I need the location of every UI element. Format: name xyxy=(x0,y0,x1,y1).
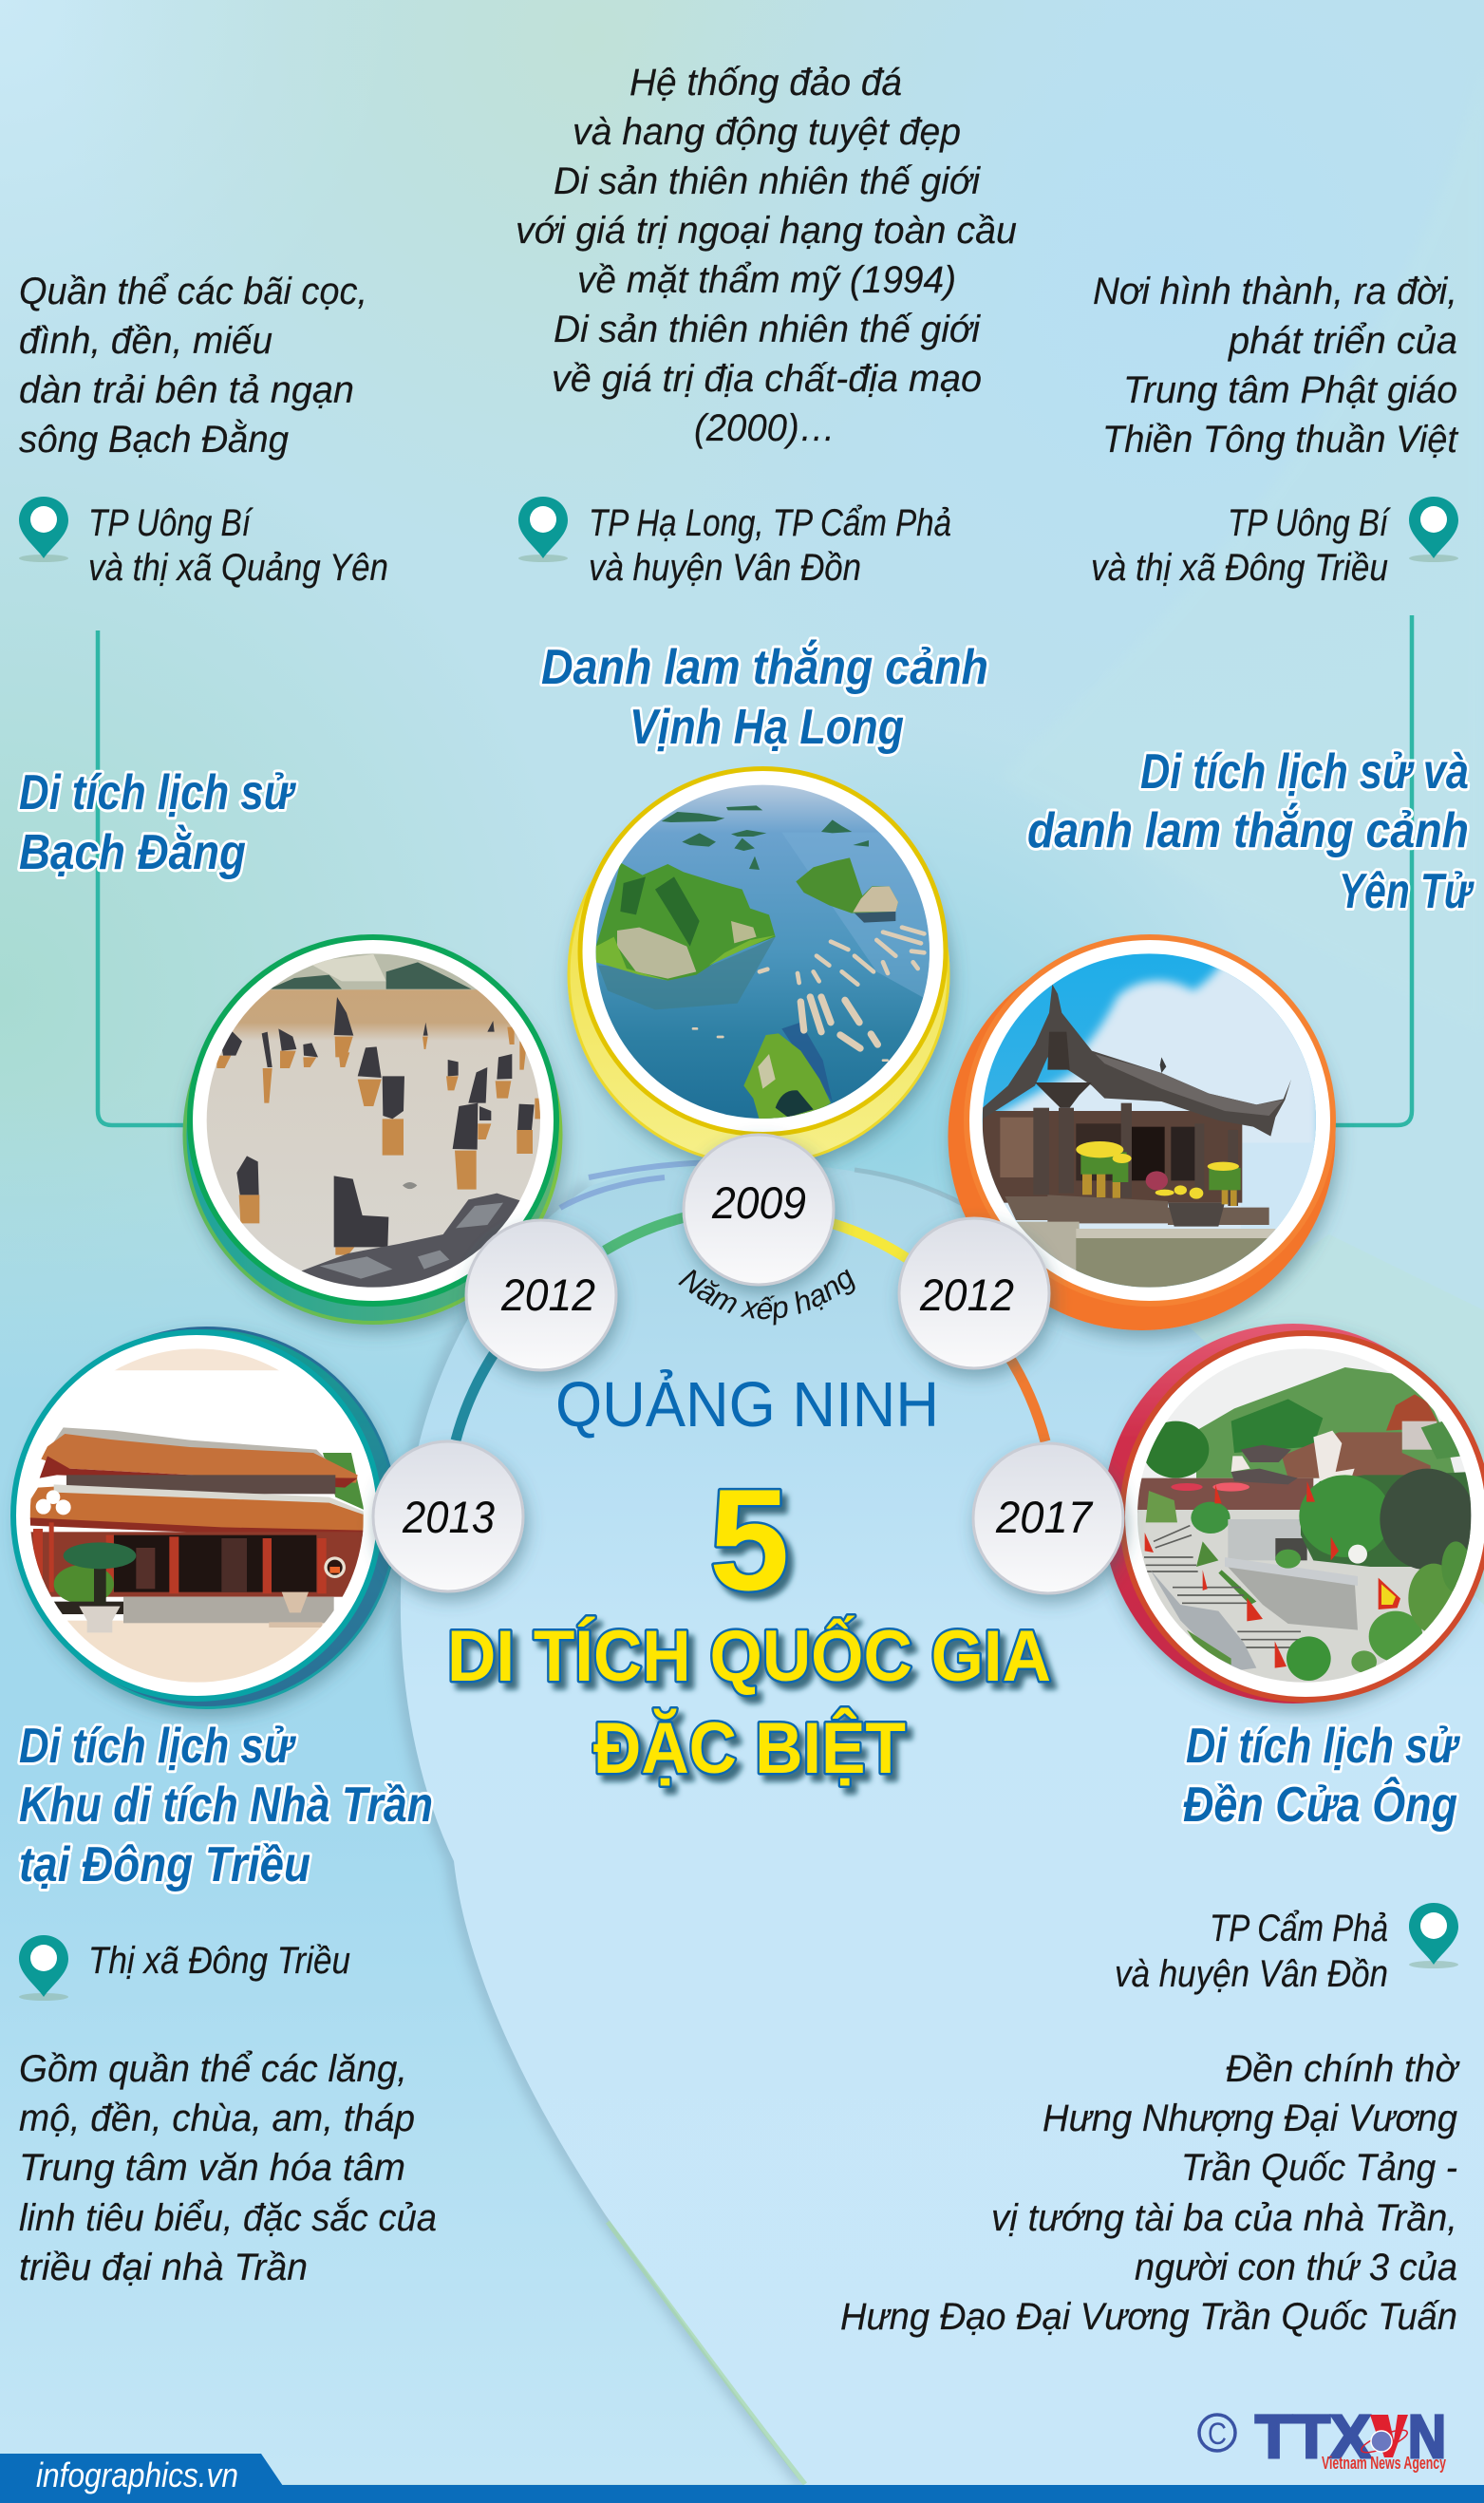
year badge 2012 Bạch Đằng xyxy=(466,1220,616,1370)
heading: Vịnh Hạ Long: Danh lam thắng cảnh xyxy=(541,639,988,695)
title: Di tích quốc gia đặc biệt: DI TÍCH QUỐC GIA xyxy=(447,1616,1051,1697)
text: Đền Cửa Ông description: người con thứ 3 của xyxy=(1135,2247,1457,2288)
year badge 2009: 2009 xyxy=(711,1177,806,1228)
text: Nơi hình thành description xyxy=(1093,271,1459,461)
text: Hệ thống đảo đá description: về giá trị địa chất-địa mạo xyxy=(552,358,982,400)
text: Quần thể description: dàn trải bên tả ngạn xyxy=(19,369,354,411)
text: Quần thể description: Quần thể các bãi cọc, xyxy=(19,271,367,312)
logo: TTXVN: C xyxy=(1208,2417,1227,2451)
photo circle: Khu di tích Nhà Trần xyxy=(10,1327,397,1707)
text: Đền Cửa Ông description: Đền chính thờ xyxy=(1226,2048,1460,2090)
text: Quần thể description xyxy=(19,271,367,461)
curved label: Năm xếp hạng: Năm xếp hạng xyxy=(678,1269,855,1326)
heading: Khu di tích Nhà Trần: Di tích lịch sử xyxy=(19,1719,296,1774)
heading: Vịnh Hạ Long xyxy=(541,639,988,755)
footer band: infographics.vn xyxy=(36,2456,238,2494)
photo circle: Yên Tử xyxy=(948,934,1336,1330)
year badge 2017 xyxy=(973,1443,1123,1593)
year badge 2012 Bạch Đằng: 2012 xyxy=(500,1270,595,1320)
title: Di tích quốc gia đặc biệt xyxy=(447,1616,1051,1789)
heading: Vịnh Hạ Long: Vịnh Hạ Long xyxy=(629,700,904,755)
connector line: Yên Tử xyxy=(1329,615,1412,1125)
year badge 2012 Yên Tử xyxy=(899,1218,1049,1368)
text: Nhà Trần description: triều đại nhà Trần xyxy=(19,2247,308,2288)
heading: Đền Cửa Ông xyxy=(1183,1719,1460,1833)
text: Quần thể description: sông Bạch Đằng xyxy=(19,418,289,461)
text: Hệ thống đảo đá description: về mặt thẩm mỹ (1994) xyxy=(577,259,956,301)
location: Hạ Long, Cẩm Phả, Vân Đồn: và huyện Vân Đồn xyxy=(589,547,861,589)
text: Đền Cửa Ông description: Hưng Nhượng Đại Vương xyxy=(1043,2098,1457,2139)
heading: Bạch Đằng: Di tích lịch sử xyxy=(19,765,296,820)
text: Nhà Trần description xyxy=(19,2048,437,2288)
location: Hạ Long, Cẩm Phả, Vân Đồn xyxy=(518,497,951,589)
timeline arc xyxy=(456,1216,1045,1441)
text: Nhà Trần description: Trung tâm văn hóa tâm xyxy=(19,2147,405,2189)
text: Nơi hình thành description: Nơi hình thành, ra đời, xyxy=(1093,271,1457,312)
heading: Bạch Đằng: Bạch Đằng xyxy=(19,824,246,880)
location: Đông Triều: Thị xã Đông Triều xyxy=(88,1940,350,1982)
heading: Khu di tích Nhà Trần: tại Đông Triều xyxy=(19,1837,310,1892)
text: Hệ thống đảo đá description: với giá trị ngoại hạng toàn cầu xyxy=(516,210,1017,252)
text: Nhà Trần description: mộ, đền, chùa, am, tháp xyxy=(19,2098,415,2139)
year badge 2012 Yên Tử: 2012 xyxy=(919,1270,1014,1320)
title: Quảng Ninh: QUẢNG NINH xyxy=(555,1369,939,1440)
text: Hệ thống đảo đá description: Di sản thiên nhiên thế giới xyxy=(554,309,981,350)
text: Quần thể description: đình, đền, miếu xyxy=(19,320,272,362)
year badge 2017: 2017 xyxy=(995,1492,1094,1542)
photo: bay with islands xyxy=(592,781,933,1123)
photo: Trần dynasty temple xyxy=(28,1348,366,1687)
text: Hệ thống đảo đá description: Hệ thống đảo đá xyxy=(629,62,902,104)
location: Uông Bí, Đông Triều xyxy=(1091,497,1458,589)
text: Đền Cửa Ông description: vị tướng tài ba của nhà Trần, xyxy=(991,2197,1457,2239)
heading: Bạch Đằng xyxy=(19,765,296,880)
location: Uông Bí, Đông Triều: TP Uông Bí xyxy=(1228,502,1391,544)
photo circle: Đền Cửa Ông xyxy=(1103,1324,1484,1703)
logo: TTXVN xyxy=(1199,2402,1446,2473)
heading: Khu di tích Nhà Trần xyxy=(19,1719,433,1892)
location: Cẩm Phả, Vân Đồn: TP Cẩm Phả xyxy=(1210,1908,1388,1949)
text: Hệ thống đảo đá description: và hang động tuyệt đẹp xyxy=(573,111,961,153)
photo: pagoda on the mountain xyxy=(981,952,1320,1289)
text: Nơi hình thành description: Trung tâm Phật giáo xyxy=(1123,369,1457,411)
text: Nơi hình thành description: phát triển của xyxy=(1228,320,1457,362)
footer band xyxy=(0,2454,1484,2503)
photo circle: Vịnh Hạ Long xyxy=(569,766,949,1164)
year badge 2013: 2013 xyxy=(402,1492,495,1542)
location: Uông Bí, Quảng Yên: và thị xã Quảng Yên xyxy=(88,547,388,589)
text: Đền Cửa Ông description xyxy=(840,2048,1460,2338)
location: Cẩm Phả, Vân Đồn xyxy=(1115,1903,1458,1995)
icon: location pin xyxy=(518,497,568,562)
title: Di tích quốc gia đặc biệt: ĐẶC BIỆT xyxy=(593,1707,906,1789)
title: number 5: 5 xyxy=(709,1459,790,1621)
logo: TTXVN: TTX xyxy=(1255,2402,1371,2471)
icon: location pin xyxy=(1409,497,1458,562)
heading: Yên Tử xyxy=(1027,744,1475,919)
text: Nơi hình thành description: Thiền Tông thuần Việt xyxy=(1102,419,1459,461)
location: Hạ Long, Cẩm Phả, Vân Đồn: TP Hạ Long, TP Cẩm Phả xyxy=(589,502,951,544)
text: Hệ thống đảo đá description: Di sản thiên nhiên thế giới xyxy=(554,160,981,202)
text: Hệ thống đảo đá description: (2000)… xyxy=(694,407,836,449)
connector line: Bạch Đằng xyxy=(98,630,190,1125)
central light shape xyxy=(401,1162,1484,2488)
photo circle: Bạch Đằng xyxy=(184,934,560,1323)
location: Cẩm Phả, Vân Đồn: và huyện Vân Đồn xyxy=(1115,1953,1388,1995)
text: Nhà Trần description: Gồm quần thể các lăng, xyxy=(19,2048,407,2090)
icon: location pin xyxy=(19,497,68,562)
photo: temple on hillside xyxy=(1136,1348,1475,1687)
text: Đền Cửa Ông description: Trần Quốc Tảng - xyxy=(1181,2147,1457,2189)
text: Đền Cửa Ông description: Hưng Đạo Đại Vương Trần Quốc Tuấn xyxy=(840,2296,1457,2338)
location: Đông Triều xyxy=(19,1935,350,2001)
icon: location pin xyxy=(19,1935,68,2001)
text: Hệ thống đảo đá description xyxy=(516,62,1017,449)
heading: Khu di tích Nhà Trần: Khu di tích Nhà Trần xyxy=(19,1778,433,1833)
year badge 2013 xyxy=(373,1441,523,1591)
location: Uông Bí, Quảng Yên xyxy=(19,497,388,589)
location: Uông Bí, Đông Triều: và thị xã Đông Triều xyxy=(1091,547,1388,589)
icon: location pin xyxy=(1409,1903,1458,1968)
text: Nhà Trần description: linh tiêu biểu, đặc sắc của xyxy=(19,2196,437,2239)
photo: stakes in water xyxy=(202,951,544,1293)
logo: TTXVN: N xyxy=(1408,2402,1446,2471)
location: Uông Bí, Quảng Yên: TP Uông Bí xyxy=(88,502,254,544)
year badge 2009 xyxy=(684,1135,834,1285)
